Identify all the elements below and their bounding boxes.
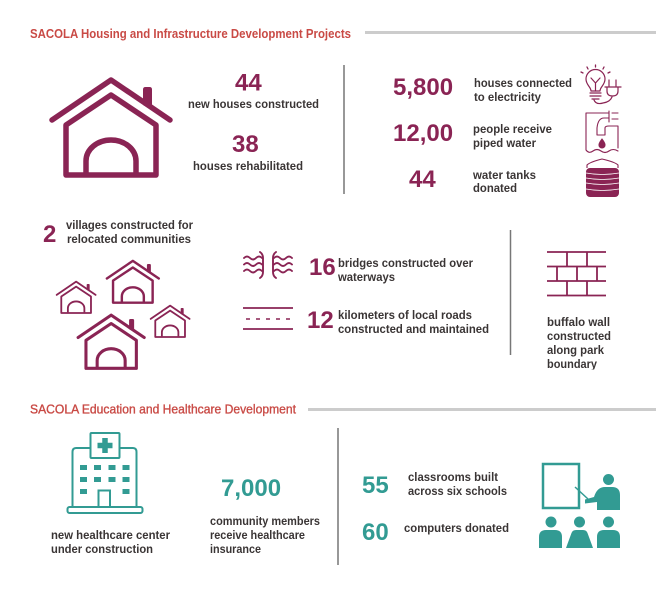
stat: electricity: houses connected [474, 76, 572, 90]
stat: bridges: waterways [337, 270, 395, 284]
icon: river waves [244, 252, 292, 278]
stat: new houses: 44 [235, 70, 262, 96]
icon: light bulb and plug [581, 65, 621, 104]
stat: piped water: piped water [473, 136, 536, 150]
stat: classrooms: across six schools [408, 484, 507, 498]
stat: healthcare insurance: receive healthcare [210, 528, 305, 542]
heading: housing and infrastructure [30, 26, 656, 41]
stat: water tanks: donated [473, 181, 517, 195]
stat: piped water: 12,00 [393, 120, 453, 147]
stat: villages: relocated communities [67, 232, 191, 246]
stat: houses rehabilitated: 38 [232, 131, 259, 158]
stat: classrooms: classrooms built [408, 470, 498, 484]
stat: roads [307, 307, 489, 336]
text: buffalo wall: boundary [547, 357, 597, 371]
heading: housing and infrastructure: SACOLA Housing and Infrastructure Development Projects [30, 26, 351, 41]
icon: brick wall [547, 252, 606, 296]
text: new healthcare center: new healthcare center [51, 528, 170, 542]
text: new healthcare center [51, 528, 170, 556]
stat: bridges [309, 254, 473, 284]
icon: hospital [68, 433, 142, 513]
stat: bridges: bridges constructed over [338, 256, 473, 270]
stat: electricity [393, 74, 572, 104]
stat: computers: computers donated [404, 521, 509, 535]
text: buffalo wall [547, 315, 611, 371]
icon: large house [52, 80, 170, 175]
stat: electricity: 5,800 [393, 74, 453, 101]
stat: water tanks: water tanks [472, 168, 536, 182]
stat: villages [43, 218, 193, 248]
stat: villages: villages constructed for [66, 218, 193, 232]
stat: computers [362, 519, 509, 546]
stat: healthcare insurance: community members [210, 514, 320, 528]
stat: electricity: to electricity [474, 90, 541, 104]
stat: healthcare insurance [210, 475, 320, 556]
icon: classroom teacher and students [539, 464, 620, 548]
icon: road [243, 308, 293, 329]
stat: new houses: new houses constructed [188, 97, 319, 111]
stat: bridges: 16 [309, 254, 336, 281]
icon: water tank [586, 159, 619, 197]
stat: healthcare insurance: 7,000 [221, 475, 281, 502]
icon: water tap [586, 111, 618, 152]
stat: computers: 60 [362, 519, 389, 546]
stat: water tanks: 44 [409, 166, 436, 193]
stat: classrooms: 55 [362, 472, 389, 499]
stat: healthcare insurance: insurance [210, 542, 261, 556]
stat: roads: kilometers of local roads [338, 308, 472, 322]
heading: education and healthcare: SACOLA Education and Healthcare Development [30, 402, 296, 416]
text: buffalo wall: buffalo wall [547, 315, 610, 329]
stat: piped water [393, 120, 552, 150]
heading: education and healthcare [30, 402, 656, 416]
text: buffalo wall: constructed [547, 329, 611, 343]
text: buffalo wall: along park [547, 343, 604, 357]
stat: houses rehabilitated: houses rehabilitated [193, 159, 303, 173]
stat: roads: constructed and maintained [338, 322, 489, 336]
stat: roads: 12 [307, 307, 334, 334]
stat: piped water: people receive [473, 122, 552, 136]
stat: new houses [188, 70, 319, 111]
stat: villages: 2 [43, 221, 56, 248]
stat: houses rehabilitated [193, 131, 303, 173]
stat: water tanks [409, 166, 536, 195]
stat: classrooms [362, 470, 507, 499]
text: new healthcare center: under construction [51, 542, 153, 556]
icon: village houses [57, 261, 190, 368]
